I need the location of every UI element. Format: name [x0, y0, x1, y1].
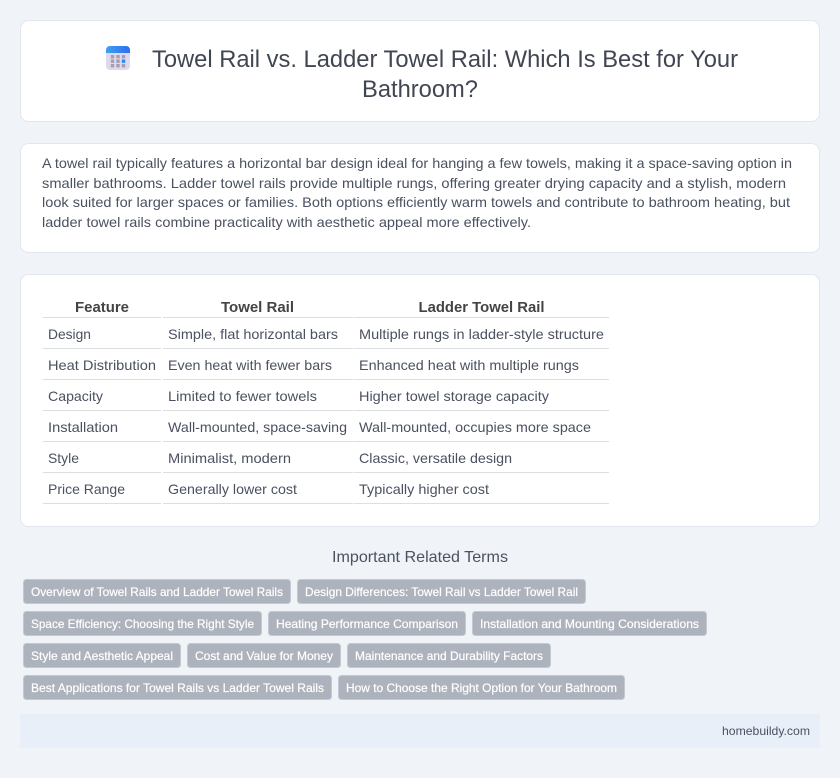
footer: homebuildy.com [722, 724, 810, 738]
tag [24, 612, 262, 636]
table row: capacity [48, 388, 549, 404]
table row: installation [48, 419, 591, 435]
table row: installation: Wall-mounted, occupies more space [359, 419, 591, 435]
text block: introduction paragraph [42, 155, 792, 230]
tag [338, 676, 624, 700]
table row: price range: Generally lower cost [168, 481, 297, 497]
tag [24, 676, 332, 700]
table row: heat distribution [48, 357, 579, 373]
table row: installation: Wall-mounted, space-saving [168, 419, 347, 435]
table row: style: Style [48, 450, 79, 466]
title: Bathroom? [362, 76, 478, 103]
tag: Best Applications for Towel Rails vs Ladder Towel Rails [31, 681, 324, 695]
table header: Towel Rail [221, 299, 294, 316]
tag [188, 644, 340, 668]
tag: Style and Aesthetic Appeal [31, 649, 173, 663]
text block: introduction paragraph: look suited for larger spaces or families. Both options efficiently warm towels and contribute to bathroom heating, but [42, 194, 790, 210]
table header: Feature [75, 299, 129, 316]
table row: price range [48, 481, 489, 497]
tag: Installation and Mounting Considerations [480, 617, 699, 631]
table header [75, 299, 544, 316]
panel: title header [20, 20, 820, 122]
table row: heat distribution: Heat Distribution [48, 357, 156, 373]
related term tags [24, 580, 706, 700]
table header: Ladder Towel Rail [418, 299, 544, 316]
tag [298, 580, 586, 604]
text block: introduction paragraph: smaller bathrooms. Ladder towel rails provide multiple rungs, offering greater drying capacity and a stylish, modern [42, 175, 786, 191]
title: Towel Rail vs. Ladder Towel Rail: Which Is Best for Your [152, 46, 738, 73]
text block: introduction paragraph: A towel rail typically features a horizontal bar design ideal for hanging a few towels, making it a space-saving option in [42, 155, 792, 171]
tag [268, 612, 466, 636]
tag: Heating Performance Comparison [276, 617, 458, 631]
icon: calendar grid [106, 46, 130, 70]
tag: Overview of Towel Rails and Ladder Towel Rails [31, 585, 283, 599]
table row: installation: Installation [48, 419, 118, 435]
table row: capacity: Higher towel storage capacity [359, 388, 549, 404]
panel: comparison table [20, 274, 820, 526]
tag [24, 644, 180, 668]
table row: style: Minimalist, modern [168, 450, 291, 466]
table row: design: Simple, flat horizontal bars [168, 326, 338, 342]
table row: heat distribution: Even heat with fewer bars [168, 357, 332, 373]
tag [472, 612, 706, 636]
tag: Cost and Value for Money [195, 649, 333, 663]
title [152, 46, 738, 103]
heading: important related terms: Important Related Terms [332, 549, 508, 566]
tag: Maintenance and Durability Factors [355, 649, 543, 663]
table row: style: Classic, versatile design [359, 450, 512, 466]
tag: How to Choose the Right Option for Your Bathroom [346, 681, 617, 695]
table row: design: Design [48, 326, 91, 342]
table row: capacity: Limited to fewer towels [168, 388, 317, 404]
table row: design [48, 326, 604, 342]
table row: heat distribution: Enhanced heat with multiple rungs [359, 357, 579, 373]
tag: Design Differences: Towel Rail vs Ladder Towel Rail [305, 585, 578, 599]
text block: introduction paragraph: ladder towel rails combine practicality with aesthetic appeal more effectively. [42, 214, 531, 230]
tag [24, 580, 290, 604]
footer [20, 714, 820, 748]
table row: style [48, 450, 512, 466]
table row: design: Multiple rungs in ladder-style structure [359, 326, 604, 342]
panel: introduction [20, 144, 820, 252]
table row: capacity: Capacity [48, 388, 103, 404]
table row: price range: Price Range [48, 481, 125, 497]
tag: Space Efficiency: Choosing the Right Style [31, 617, 254, 631]
table row: price range: Typically higher cost [359, 481, 489, 497]
tag [348, 644, 550, 668]
